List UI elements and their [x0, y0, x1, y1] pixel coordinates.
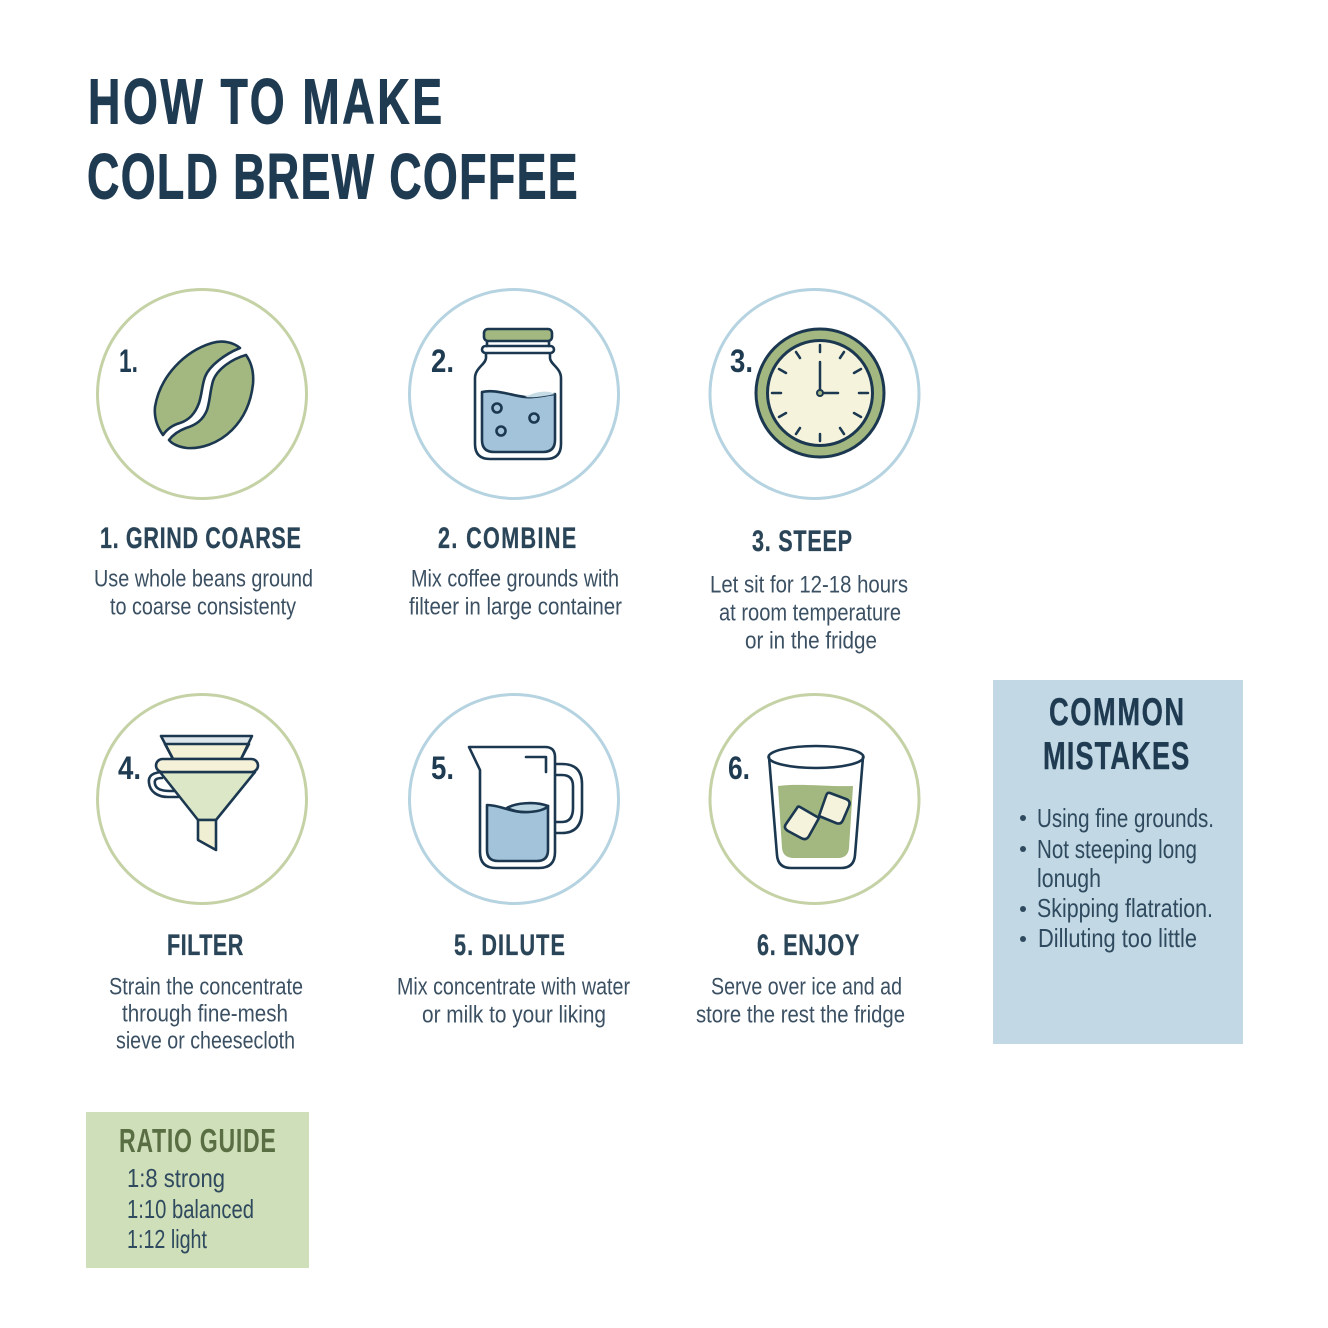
- panel: common mistakes: [993, 680, 1243, 1044]
- step number: 4.: [118, 750, 141, 786]
- description: [710, 572, 908, 654]
- step 1: grind coarse: [94, 290, 313, 620]
- description: Mix concentrate with water: [397, 974, 630, 1000]
- description: Strain the concentrate: [109, 974, 303, 1000]
- step number: 5.: [431, 750, 454, 786]
- icon: iced glass in circle: [710, 694, 919, 904]
- description: or milk to your liking: [422, 1002, 606, 1028]
- title: [87, 66, 578, 212]
- mistakes list: lonugh: [1037, 863, 1101, 893]
- title: HOW TO MAKE: [88, 66, 442, 137]
- description: [696, 974, 905, 1028]
- icon: funnel filter in circle: [98, 694, 306, 904]
- description: store the rest the fridge: [696, 1002, 905, 1028]
- heading: 3. STEEP: [752, 523, 852, 558]
- description: Use whole beans ground: [94, 566, 313, 592]
- mistakes list: Skipping flatration.: [1037, 893, 1213, 923]
- mistakes list: [1020, 803, 1214, 953]
- ratio list: 1:10 balanced: [127, 1194, 254, 1224]
- heading: FILTER: [167, 927, 243, 962]
- mistakes list: Not steeping long: [1037, 834, 1197, 864]
- description: at room temperature: [719, 600, 901, 626]
- ratio list: [127, 1163, 254, 1254]
- description: [94, 566, 313, 620]
- ratio list: 1:12 light: [127, 1224, 208, 1254]
- icon: jar in circle: [410, 290, 618, 498]
- icon: pitcher in circle: [410, 694, 618, 904]
- icon: clock in circle: [710, 290, 919, 498]
- mistakes list: Using fine grounds.: [1037, 803, 1214, 833]
- panel heading: MISTAKES: [1043, 735, 1189, 778]
- icon: coffee bean in circle: [98, 290, 306, 498]
- description: through fine-mesh: [122, 1000, 288, 1028]
- step 5: dilute: [397, 694, 630, 1028]
- description: Mix coffee grounds with: [411, 566, 619, 592]
- description: to coarse consistenty: [110, 594, 296, 620]
- description: filteer in large container: [409, 594, 622, 620]
- heading: 5. DILUTE: [454, 927, 565, 962]
- description: sieve or cheesecloth: [116, 1028, 295, 1054]
- description: [397, 974, 630, 1028]
- step 6: enjoy: [696, 694, 919, 1028]
- description: Let sit for 12-18 hours: [710, 572, 908, 598]
- step number: 6.: [728, 750, 750, 786]
- description: or in the fridge: [745, 628, 877, 654]
- panel heading: COMMON: [1049, 691, 1184, 734]
- heading: 2. COMBINE: [438, 520, 576, 555]
- heading: 6. ENJOY: [757, 927, 859, 962]
- ratio list: 1:8 strong: [127, 1163, 225, 1193]
- description: [109, 974, 303, 1054]
- step 4: filter: [98, 694, 306, 1054]
- step number: 2.: [431, 343, 454, 379]
- step number: 1.: [119, 343, 138, 379]
- description: Serve over ice and ad: [711, 974, 902, 1000]
- title: COLD BREW COFFEE: [87, 141, 578, 212]
- panel heading: RATIO GUIDE: [119, 1123, 276, 1160]
- mistakes list: Dilluting too little: [1038, 923, 1197, 953]
- panel: ratio guide: [86, 1112, 309, 1268]
- heading: 1. GRIND COARSE: [100, 520, 301, 555]
- step number: 3.: [730, 343, 753, 379]
- step 2: combine: [409, 290, 622, 620]
- description: [409, 566, 622, 620]
- step 3: steep: [710, 290, 919, 654]
- panel heading: [1043, 691, 1189, 778]
